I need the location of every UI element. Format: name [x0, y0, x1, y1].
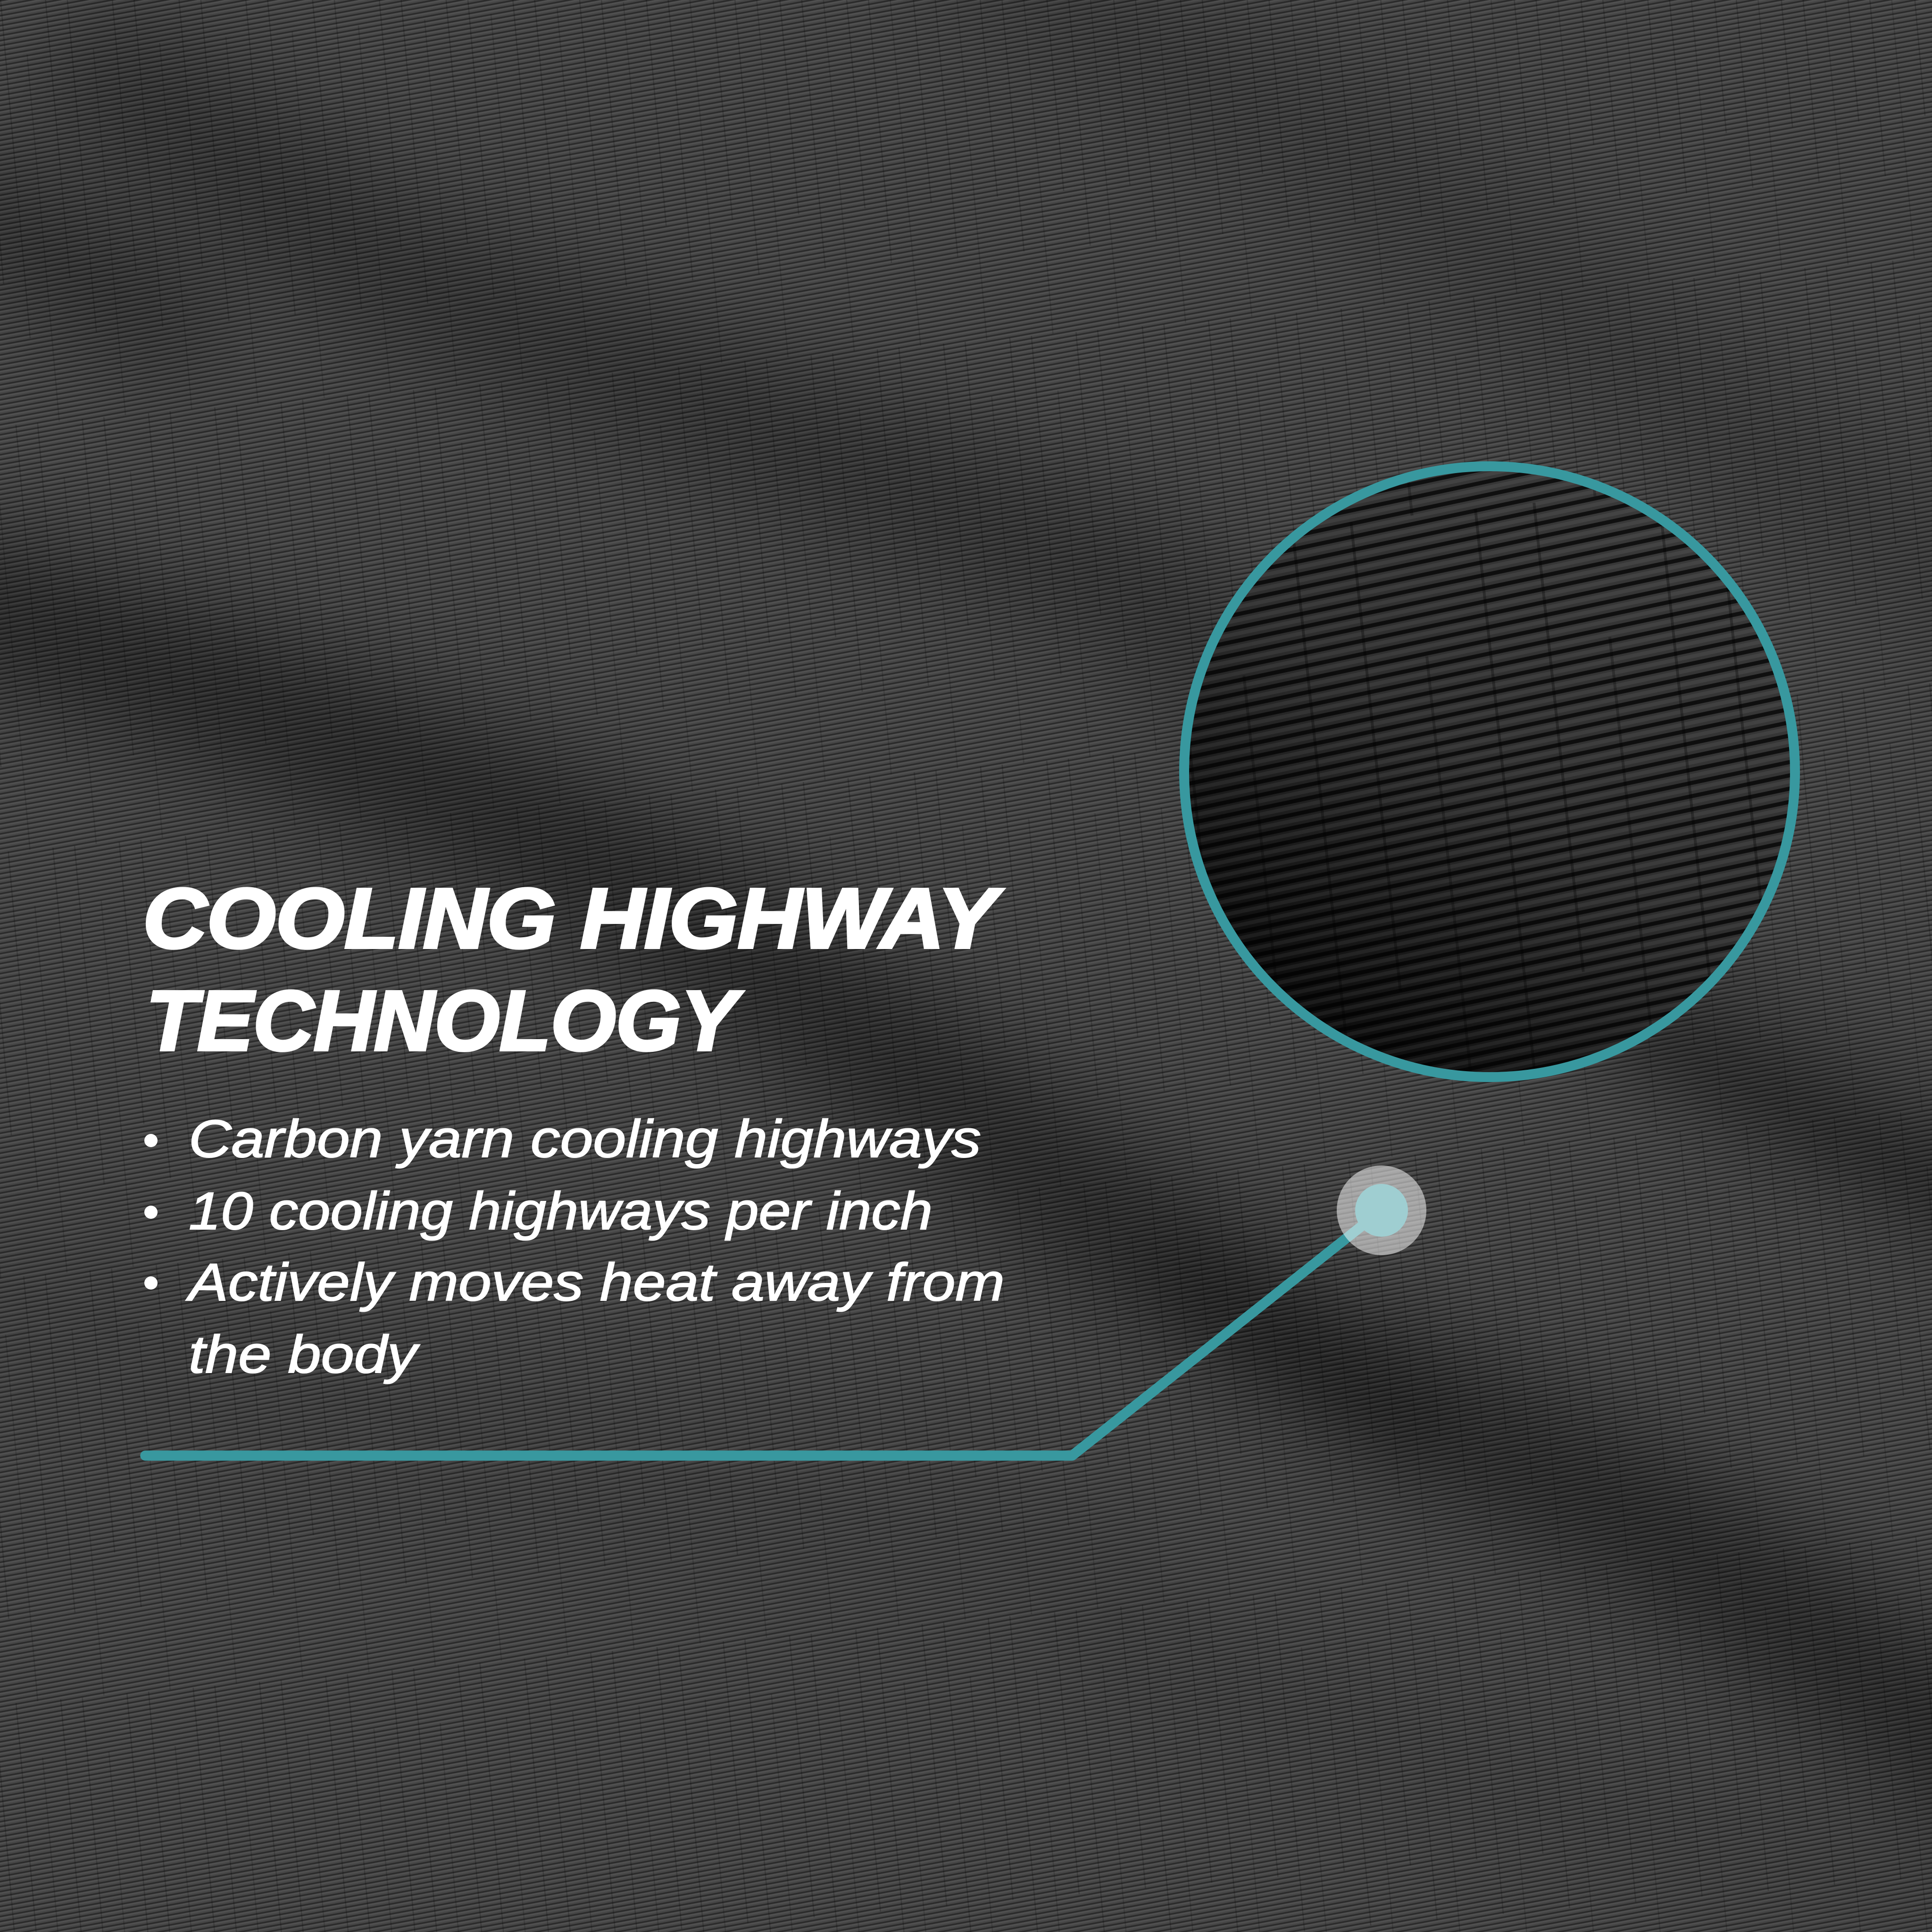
bullet 3: Actively moves heat away from — [185, 1253, 1005, 1312]
magnified fabric circle — [1179, 461, 1800, 1082]
bullet 2: 10 cooling highways per inch — [189, 1182, 933, 1241]
bullet 1: Carbon yarn cooling highways — [189, 1109, 981, 1168]
bullet 3: the body — [189, 1325, 420, 1384]
title — [143, 871, 1004, 1068]
callout leader line with hotspot — [145, 1166, 1426, 1456]
bullet list — [144, 1109, 1005, 1384]
title: COOLING HIGHWAY — [143, 871, 1004, 966]
title: TECHNOLOGY — [146, 974, 743, 1068]
bullet 3 — [144, 1253, 1005, 1384]
